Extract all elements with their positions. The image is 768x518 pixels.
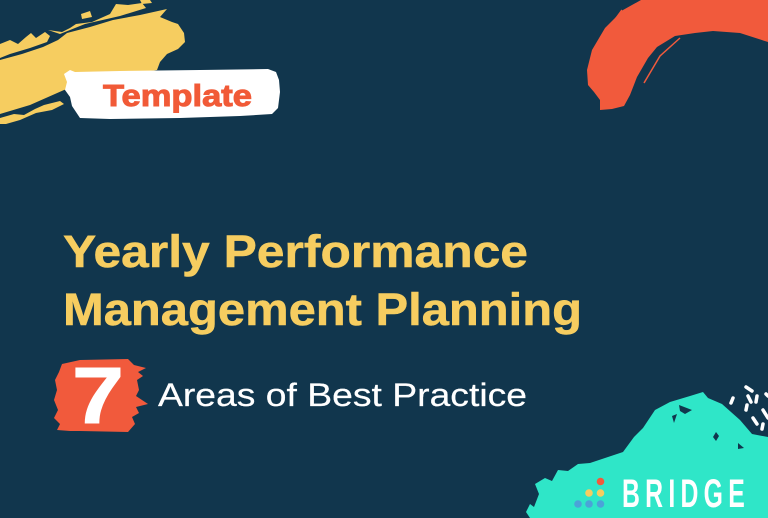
- red brush square: [54, 359, 148, 432]
- red brush stroke: [587, 0, 768, 110]
- brush nicks: [672, 405, 744, 449]
- title line 2: Management Planning: [63, 284, 582, 335]
- logo dots: [574, 478, 604, 508]
- logo wordmark: BRIDGE: [622, 472, 745, 517]
- white flecks: [731, 387, 768, 429]
- white brush label: [64, 69, 280, 119]
- numeral: 7: [72, 351, 124, 440]
- bridge logo: [574, 472, 745, 517]
- label text: Template: [103, 78, 252, 113]
- main title: [63, 226, 582, 335]
- template badge: [64, 69, 280, 119]
- title line 1: Yearly Performance: [63, 226, 528, 277]
- subtitle: Areas of Best Practice: [158, 377, 527, 413]
- yellow brush stroke: [0, 0, 185, 124]
- number seven badge: [54, 351, 148, 440]
- teal brush shape: [526, 387, 768, 518]
